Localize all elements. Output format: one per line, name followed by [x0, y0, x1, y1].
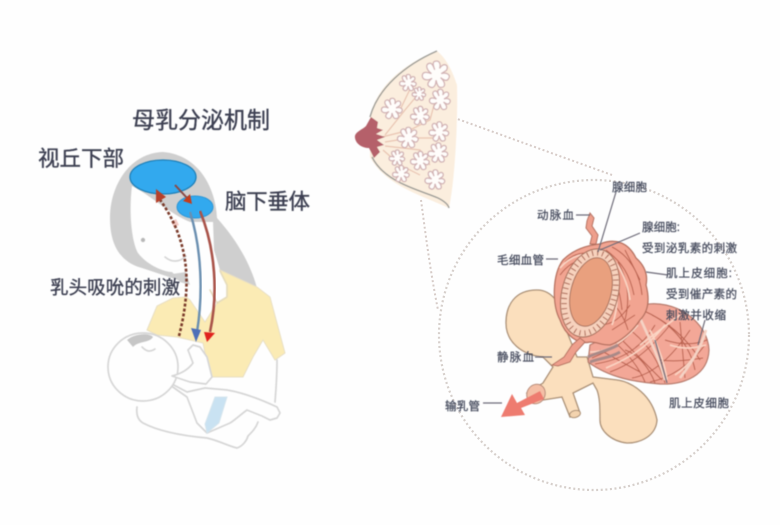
label: myoepithelial cell note: 肌上皮细胞:: [666, 266, 732, 280]
arrow: nipple stimulation dashed: [156, 189, 187, 336]
label: acinar cell prolactin note: 腺细胞:: [642, 220, 680, 234]
label: capillary: 毛细血管: [497, 253, 544, 267]
arrow: hypothalamus to pituitary: [175, 185, 192, 204]
panel: dotted magnifying circle: [439, 180, 749, 490]
duct outflow arrow: [501, 391, 544, 417]
duct branch end: [569, 409, 581, 419]
panel: breast cross-section: [355, 51, 457, 208]
arrow: prolactin blue: [190, 212, 201, 342]
label: oxytocin stimulus: 受到催产素的: [666, 287, 737, 301]
vein: [552, 338, 585, 366]
label: pituitary: 脑下垂体: [225, 190, 310, 214]
mother face and neck: [131, 186, 220, 322]
shirt collar: [210, 271, 227, 303]
panel: alveolus detail: [501, 213, 709, 443]
mother arm and lap outline: [137, 360, 277, 448]
alveolar cell ring: [551, 242, 629, 344]
label: nipple suckling stimulus: 乳头吸吮的刺激: [50, 277, 180, 298]
artery: [586, 213, 598, 244]
arrow: oxytocin red: [200, 211, 215, 342]
label: vein: 静脉血: [497, 350, 534, 364]
baby head: [108, 333, 178, 401]
breast outline: [370, 51, 449, 208]
right alveolus: [588, 304, 709, 384]
baby arm and fist: [172, 345, 212, 384]
mother face details: [141, 219, 190, 285]
nipple and areola: [355, 117, 385, 158]
breast tissue: [370, 51, 457, 208]
pituitary ellipse: [177, 196, 213, 218]
panel: mother nursing baby illustration: [108, 152, 285, 448]
right alveolus vessels: [588, 310, 707, 383]
label: hypothalamus: 视丘下部: [38, 147, 124, 171]
milk ducts: [382, 85, 438, 175]
top alveolus outer: [554, 241, 648, 345]
baby body and legs: [170, 383, 280, 433]
top alveolus vessels: [560, 247, 642, 330]
label: myoepithelial cell: 肌上皮细胞: [669, 396, 730, 410]
baby diaper: [205, 397, 227, 433]
milk lobules: [381, 61, 450, 189]
label: acinar cell top: 腺细胞: [612, 180, 648, 194]
pointer lines: [483, 192, 705, 403]
title: 母乳分泌机制: [132, 107, 270, 133]
mother shirt: [147, 270, 285, 377]
hypothalamus ellipse: [130, 160, 196, 194]
dotted connector lines: [421, 113, 612, 310]
label: artery: 动脉血: [537, 208, 574, 222]
mother hair: [110, 152, 257, 288]
label: prolactin stimulus: 受到泌乳素的刺激: [642, 241, 738, 255]
label: lactiferous duct: 输乳管: [445, 399, 480, 413]
milk lobes and ducts: [506, 290, 657, 443]
duct ring: [523, 381, 549, 407]
baby: [108, 333, 280, 433]
label: contraction: 刺激并收缩: [666, 308, 726, 322]
alveolar lumen: [563, 253, 619, 331]
